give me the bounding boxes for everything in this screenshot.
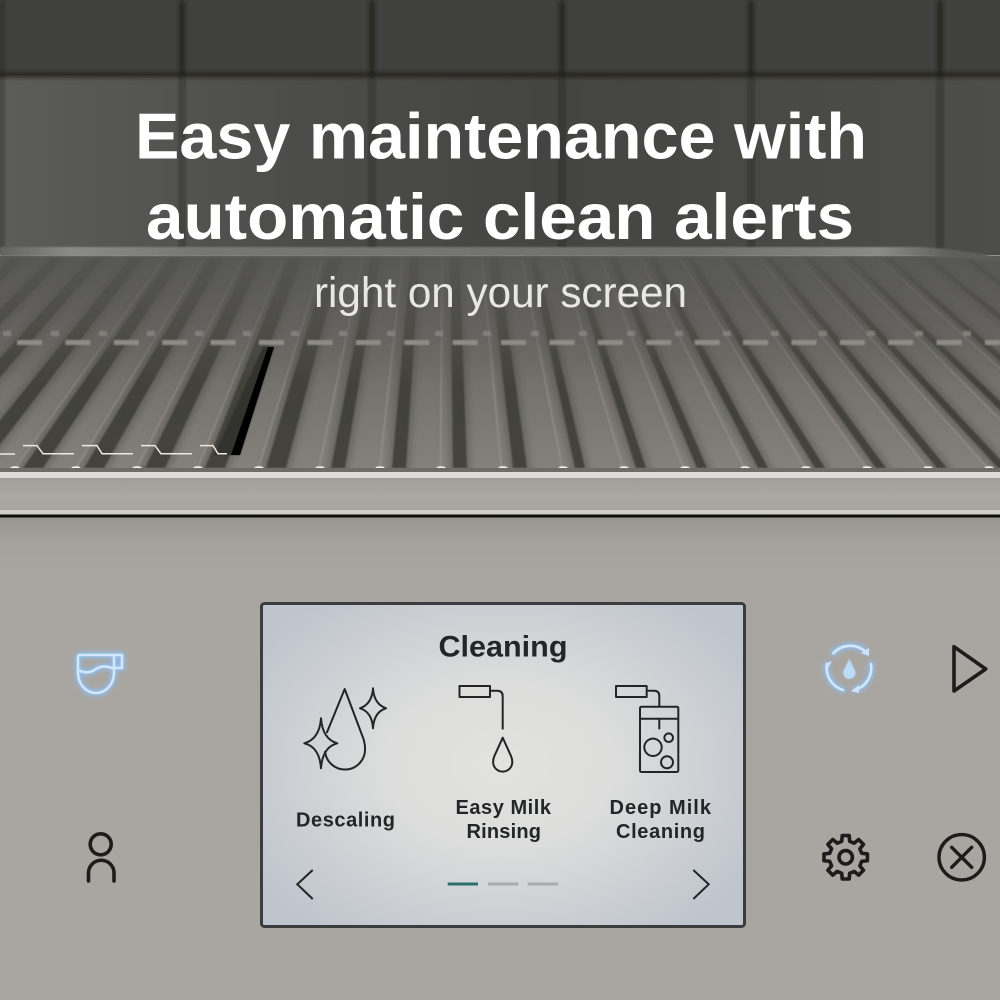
label: Deep Milk Cleaning bbox=[610, 797, 712, 843]
icon: coffee cup button (lit) bbox=[78, 655, 122, 693]
title bbox=[135, 100, 867, 253]
icon: descaling drop with sparkles bbox=[304, 688, 386, 770]
grate ribs: dark grooves bbox=[0, 258, 1000, 468]
subtitle: right on your screen bbox=[314, 269, 687, 317]
drip tray grate bbox=[0, 247, 1000, 469]
label: Easy Milk Rinsing: Easy Milk bbox=[456, 797, 552, 819]
display screen bbox=[262, 604, 744, 926]
title: automatic clean alerts bbox=[146, 180, 854, 253]
pagination indicator bbox=[448, 882, 558, 886]
grate ribs: light edges bbox=[15, 258, 1000, 468]
black slot in grate bbox=[214, 347, 274, 455]
icon: settings gear button bbox=[824, 836, 867, 879]
background: dark tile wall bbox=[0, 0, 1000, 255]
screen heading: Cleaning bbox=[438, 630, 568, 664]
white zigzag rib profile bbox=[0, 446, 227, 454]
machine front rail bbox=[0, 468, 1000, 518]
icon: deep milk cleaning bbox=[616, 686, 678, 772]
rib end highlights bbox=[10, 466, 994, 469]
arrow: next bbox=[693, 870, 709, 899]
label: Descaling: Descaling bbox=[296, 810, 395, 832]
label: Deep Milk Cleaning: Deep Milk bbox=[610, 797, 712, 819]
control panel bbox=[0, 518, 1000, 1000]
arrow: previous bbox=[297, 870, 313, 899]
grate back rim bbox=[0, 247, 1000, 262]
label: Deep Milk Cleaning: Cleaning bbox=[616, 821, 705, 843]
label: Easy Milk Rinsing: Rinsing bbox=[466, 821, 541, 843]
far end fade bbox=[0, 256, 1000, 386]
label: Easy Milk Rinsing bbox=[456, 797, 552, 843]
grate far ridge dashes bbox=[3, 334, 1000, 342]
icon: easy milk rinsing bbox=[460, 686, 512, 772]
grate ribs: soft shadow around grooves bbox=[0, 258, 1000, 468]
icon: cancel button bbox=[939, 835, 984, 880]
title: Easy maintenance with bbox=[135, 100, 867, 172]
icon: play button bbox=[954, 647, 986, 691]
icon: cleaning cycle button (lit) bbox=[825, 646, 871, 693]
icon: user profile button bbox=[88, 834, 114, 881]
